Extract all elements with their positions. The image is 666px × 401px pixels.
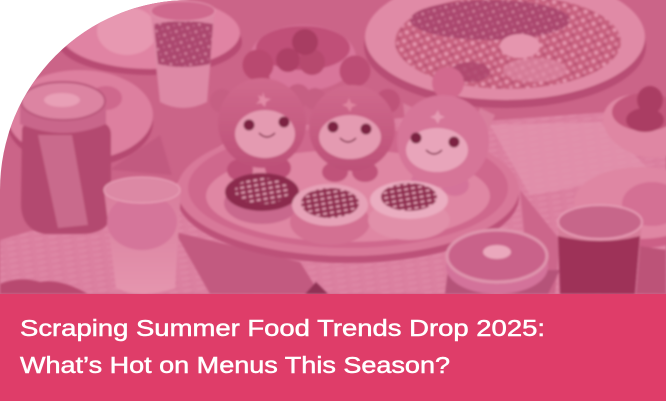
character: right [397, 67, 495, 196]
strawberry: small [305, 282, 328, 294]
jar: pickles [20, 82, 111, 234]
stripes: bottom right napkin [636, 246, 666, 294]
plate: center large [177, 124, 519, 263]
tablecloth [0, 108, 666, 294]
plate: bottom left [0, 279, 88, 294]
bowl: strawberries top [250, 25, 356, 91]
plate: top left [58, 0, 242, 75]
food photo with pink duotone [0, 0, 666, 294]
cookie: middle [290, 184, 370, 245]
plate: left with small bowl [7, 70, 153, 167]
plate: large right [364, 0, 646, 108]
title banner [0, 294, 666, 401]
character: middle [304, 56, 400, 182]
plate: orange slice [592, 169, 666, 248]
bowl: strawberries right [604, 85, 666, 156]
table shadows [112, 135, 320, 294]
cookie: right [368, 181, 450, 240]
cookie: left [224, 173, 300, 224]
title text [20, 315, 545, 378]
title text: Scraping Summer Food Trends Drop 2025: [20, 315, 545, 341]
jar: bottom lid [445, 230, 560, 294]
glass: front [104, 177, 181, 294]
table [0, 0, 666, 294]
glass: right with dark drink [558, 205, 642, 294]
glass: top [150, 1, 215, 108]
character: left [220, 49, 308, 181]
cloth highlight [490, 122, 650, 195]
title text: What’s Hot on Menus This Season? [20, 352, 450, 378]
